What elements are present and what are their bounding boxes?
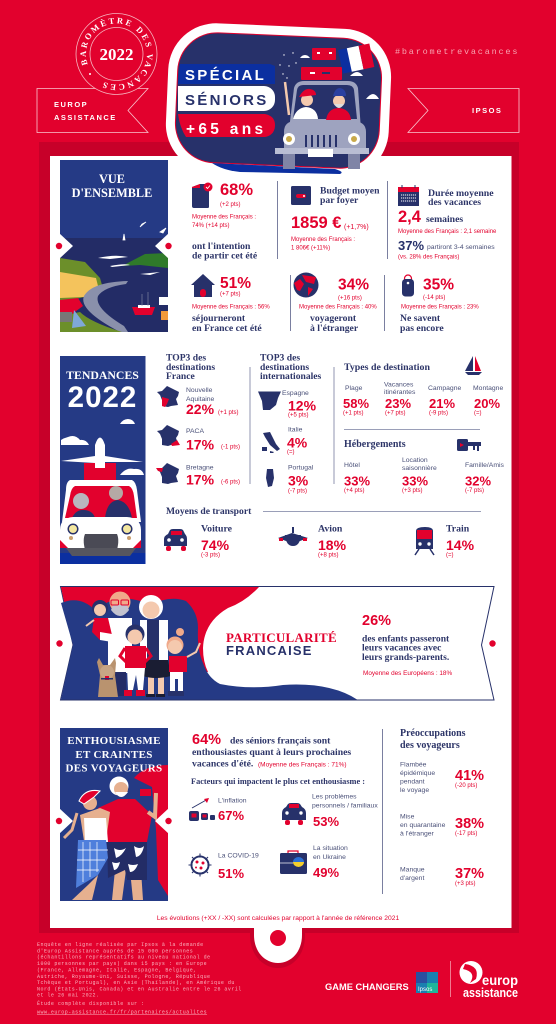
top3 destinations France: 17% [186, 436, 215, 452]
préoccupations des voyageurs: à l'étranger [400, 830, 435, 838]
préoccupations des voyageurs: d'argent [400, 875, 424, 882]
préoccupations des voyageurs: 41% [455, 768, 484, 784]
jeep [275, 81, 369, 169]
types de destination: Plage [345, 385, 363, 392]
types de destination: (=) [474, 410, 482, 416]
stat: intention de partir: 74% (+14 pts) [192, 223, 230, 229]
icon: virus [188, 854, 212, 876]
icon: luggage tag [402, 275, 414, 296]
stat: ne savent pas encore: pas encore [400, 323, 444, 334]
stat 26% [362, 613, 452, 677]
stat: voyageront à l'étranger: voyageront [310, 313, 357, 324]
stat: budget moyen: 1859 € [291, 214, 341, 232]
préoccupations des voyageurs: Mise [400, 814, 415, 820]
heading: VUE [99, 172, 125, 186]
icon: plane [278, 527, 308, 546]
icon: map France PACA [157, 425, 180, 446]
logo: Ipsos game changers [325, 972, 438, 993]
heading [72, 172, 152, 200]
moyens de transport: (=) [446, 552, 454, 558]
top3 destinations internationales: destinations [260, 362, 309, 373]
logo: Europ Assistance [460, 961, 518, 1000]
car with couple [60, 480, 146, 564]
logo: Ipsos game changers: Ipsos [418, 987, 432, 993]
icon: key [457, 439, 481, 451]
methodology note: Nord (États-Unis, Canada) et en Australie entre le 26 avril [37, 986, 242, 992]
dark red frame [39, 142, 519, 933]
dots [56, 818, 172, 824]
text: 64% enthousiastes: enthousiastes quant à leurs prochaines [192, 747, 351, 758]
types de destination: 20% [474, 396, 500, 411]
heading: TENDANCES [66, 368, 139, 382]
facteurs: Facteurs qui impactent le plus cet enthousiasme : [191, 777, 365, 786]
moyens de transport: Train [446, 524, 470, 534]
hébergements: (-7 pts) [465, 488, 484, 494]
types de destination: Vacances [384, 382, 414, 388]
préoccupations des voyageurs: des voyageurs [400, 740, 460, 751]
stat: intention de partir: 68% [220, 181, 253, 199]
stat: voyageront à l'étranger: (+16 pts) [338, 296, 362, 302]
methodology note: 1000 personnes par pays) dans 15 pays : en Europe [37, 961, 207, 967]
stamp: baromètre 2022: BAROMÈTRE DES VACANCES [80, 18, 153, 90]
dots [56, 243, 172, 249]
stat: séjourneront en France: séjourneront [192, 313, 246, 324]
types de destination: 23% [385, 396, 411, 411]
top3 destinations France [156, 352, 240, 488]
icon: car [282, 803, 306, 825]
stat: durée moyenne: 2,4 [398, 208, 422, 226]
types de destination: 21% [429, 396, 455, 411]
logo: Europ Assistance: europ [482, 973, 518, 988]
man [98, 776, 156, 900]
dog [97, 658, 118, 697]
methodology note: Enquête en ligne réalisée par Ipsos à la demande [37, 942, 204, 948]
icon: house [191, 274, 215, 297]
facteurs: L'inflation [218, 798, 247, 804]
types de destination: Campagne [428, 385, 461, 392]
heading: ENTHOUSIASME [67, 735, 161, 747]
grandfather [108, 592, 132, 696]
top3 destinations internationales: internationales [260, 371, 322, 382]
strip: séniors: SÉNIORS [185, 92, 269, 109]
stat: budget moyen: Moyenne des Français : [291, 237, 355, 243]
text: 64% enthousiastes: vacances d'été. [192, 758, 253, 770]
icon: briefcase Ukraine [280, 851, 307, 874]
girl [166, 628, 200, 696]
woman [64, 790, 110, 900]
top3 destinations internationales: TOP3 des [260, 352, 300, 364]
stat: voyageront à l'étranger: Moyenne des Français : 40% [299, 304, 377, 310]
text: 64% enthousiastes: des séniors français sont [230, 736, 331, 746]
stamp: baromètre 2022: 2022 [100, 45, 134, 64]
facteurs: personnels / familiaux [312, 802, 378, 810]
methodology note: www.europ-assistance.fr/fr/partenaires/actualites [37, 1010, 207, 1016]
top3 destinations France: Bretagne [186, 464, 214, 472]
top3 destinations France: (-1 pts) [221, 444, 240, 450]
types de destination: (+1 pts) [343, 410, 364, 416]
stat: intention de partir: de partir cet été [192, 250, 258, 262]
stat: voyageront à l'étranger: 34% [338, 276, 369, 294]
top3 destinations France: 22% [186, 401, 215, 417]
icon: wallet [291, 186, 311, 205]
icon: globe [294, 272, 318, 298]
top3 destinations internationales [258, 352, 322, 494]
red wave [61, 587, 259, 672]
hébergements: Famille/Amis [465, 462, 504, 469]
hébergements: saisonnière [402, 465, 437, 472]
methodology note: Étude complète disponible sur : [37, 1000, 145, 1007]
suitcases [301, 48, 342, 80]
stat 26%: leurs grands-parents. [362, 652, 449, 663]
icon: suitcase check [192, 182, 212, 208]
landscape illustration [60, 160, 168, 332]
stat: durée moyenne: Durée moyenne [428, 188, 494, 199]
facteurs: en Ukraine [313, 854, 346, 861]
préoccupations des voyageurs: en quarantaine [400, 822, 446, 829]
icon: map France Bretagne [156, 463, 179, 484]
hébergements: Location [402, 457, 428, 464]
travellers [285, 82, 351, 120]
heading: ET CRAINTES [75, 749, 153, 761]
clouds and stars [279, 52, 379, 99]
heading [66, 735, 162, 774]
types de destination: itinérantes [384, 389, 416, 396]
stat 26%: leurs vacances avec [362, 642, 442, 654]
hébergements: (+3 pts) [402, 488, 423, 494]
top3 destinations internationales: 12% [288, 398, 317, 414]
types de destination: Types de destination [344, 362, 430, 373]
hébergements: 33% [402, 474, 428, 488]
stat: intention de partir [192, 181, 258, 262]
top3 destinations France: (+1 pts) [218, 410, 239, 416]
hébergements: 33% [344, 474, 370, 488]
methodology note: (échantillons représentatifs au niveau national de [37, 954, 211, 960]
bottom tab with dot [254, 927, 302, 963]
hébergements: 32% [465, 474, 491, 488]
préoccupations des voyageurs: (-20 pts) [455, 783, 477, 789]
heading: PARTICULARITÉ [226, 630, 337, 645]
icon: sailboat [465, 356, 482, 375]
plane [61, 438, 143, 468]
seniors couple [64, 776, 156, 900]
panel: particularité française: FRANCAISE [226, 643, 313, 658]
ribbon: Ipsos [408, 88, 519, 132]
top3 destinations France: (-6 pts) [221, 480, 240, 486]
toddler [86, 600, 118, 642]
stat: budget moyen: (+1,7%) [344, 224, 369, 231]
dots [56, 640, 496, 647]
facteurs: Les problèmes [312, 794, 357, 800]
moyens de transport: 74% [201, 537, 230, 553]
icon: map France Nouvelle-Aquitaine [157, 386, 179, 407]
stat: intention de partir: (+2 pts) [220, 202, 241, 208]
stat: intention de partir: Moyenne des Français : [192, 214, 256, 220]
red curtain [134, 765, 168, 896]
icon: inflation [189, 798, 215, 821]
top3 destinations internationales: Italie [288, 426, 303, 434]
stat 26%: Moyenne des Européens : 18% [363, 670, 452, 677]
top3 destinations France: destinations [166, 362, 215, 373]
logo: Ipsos game changers: GAME CHANGERS [325, 982, 409, 992]
préoccupations des voyageurs: Préoccupations [400, 728, 466, 739]
stat: séjourneront en France [191, 274, 270, 334]
stat: intention de partir: ont l'intention [192, 241, 251, 252]
stat: durée moyenne: (vs. 28% des Français) [398, 254, 459, 260]
stat: durée moyenne: des vacances [428, 197, 481, 208]
stat 26%: 26% [362, 613, 391, 629]
facteurs: 67% [218, 808, 244, 823]
stat: budget moyen: par foyer [320, 195, 359, 206]
notches [59, 808, 169, 834]
strip: spécial: SPÉCIAL [185, 67, 266, 84]
white main panel [50, 156, 512, 928]
stat: ne savent pas encore: Ne savent [400, 313, 441, 324]
hébergements [344, 439, 504, 494]
facteurs: 53% [313, 814, 339, 829]
types de destination: (+7 pts) [385, 410, 406, 416]
top3 destinations internationales: Portugal [288, 464, 314, 472]
ribbon: Europ Assistance: EUROP [54, 100, 88, 109]
panel: vue d'ensemble [56, 160, 172, 332]
logo: Europ Assistance: assistance [463, 985, 518, 1000]
strip: +65 ans: +65 ans [186, 121, 266, 138]
icon: map Portugal [266, 469, 274, 487]
hashtag: #barometrevacances [395, 47, 519, 57]
top3 destinations France: Nouvelle [186, 387, 213, 394]
icon: train [415, 527, 434, 555]
top3 destinations France: 17% [186, 472, 215, 488]
moyens de transport: Voiture [201, 524, 233, 534]
types de destination: Montagne [473, 385, 503, 392]
notches [59, 233, 169, 259]
types de destination [343, 356, 503, 416]
stat: budget moyen: Budget moyen [320, 186, 380, 196]
stat: voyageront à l'étranger [294, 272, 377, 334]
hébergements: Hébergements [344, 439, 406, 450]
boy [120, 624, 151, 696]
text: 64% enthousiastes [192, 732, 351, 770]
préoccupations des voyageurs: Manque [400, 866, 425, 874]
icon: calendar [398, 185, 419, 206]
banner outline [60, 586, 494, 700]
family illustration [86, 592, 200, 697]
methodology note: Autriche, Royaume-Uni, Suisse, Pologne, République [37, 974, 211, 980]
strip: +65 ans [178, 114, 275, 138]
methodology note: et le 26 mai 2022. [37, 992, 99, 998]
stat: durée moyenne [398, 185, 497, 260]
panel: particularité française [56, 586, 496, 700]
hébergements: Hôtel [344, 462, 360, 469]
top3 destinations internationales: Espagne [282, 390, 309, 397]
préoccupations des voyageurs: (+3 pts) [455, 881, 476, 887]
facteurs: La situation [313, 845, 348, 852]
ribbon: Ipsos: IPSOS [472, 106, 502, 115]
moyens de transport: 14% [446, 537, 475, 553]
préoccupations des voyageurs: le voyage [400, 787, 429, 794]
moyens de transport: 18% [318, 537, 347, 553]
bottom tab shadow [250, 928, 305, 968]
facteurs: 49% [313, 865, 339, 880]
stat: budget moyen: 1 806€ (+11%) [291, 246, 330, 252]
ribbon: Europ Assistance [37, 88, 148, 132]
préoccupations des voyageurs: (-17 pts) [455, 831, 477, 837]
stat: budget moyen [291, 186, 380, 252]
icon: map Italy [262, 432, 280, 453]
ribbon: Europ Assistance: ASSISTANCE [54, 113, 117, 122]
header badge: spécial séniors [164, 21, 393, 180]
stat: durée moyenne: partiront 3-4 semaines [427, 244, 495, 251]
stat: voyageront à l'étranger: à l'étranger [310, 323, 359, 334]
moyens de transport: Moyens de transport [166, 506, 252, 517]
moyens de transport [164, 506, 475, 558]
icon: car [164, 529, 187, 551]
clouds [61, 419, 144, 475]
methodology note [37, 942, 242, 1016]
préoccupations des voyageurs: Flambée [400, 762, 427, 768]
stat: ne savent pas encore: 35% [423, 276, 454, 294]
stat: ne savent pas encore: (-14 pts) [423, 295, 445, 301]
facteurs: 51% [218, 866, 244, 881]
top3 destinations internationales: 4% [287, 434, 308, 450]
types de destination: 58% [343, 396, 369, 411]
facteurs [188, 777, 378, 881]
facteurs: La COVID-19 [218, 852, 259, 860]
hébergements: (+4 pts) [344, 488, 365, 494]
top3 destinations France: Aquitaine [186, 396, 215, 403]
methodology note: d'Europ Assistance auprès de 15 000 personnes [37, 948, 193, 954]
grandmother [139, 595, 171, 697]
préoccupations des voyageurs: épidémique [400, 770, 435, 777]
préoccupations des voyageurs [400, 728, 484, 887]
stat: séjourneront en France: 51% [220, 275, 251, 292]
methodology note: (France, Allemagne, Italie, Espagne, Belgique, [37, 968, 197, 974]
top3 destinations France: PACA [186, 428, 204, 435]
préoccupations des voyageurs: pendant [400, 778, 425, 786]
top3 destinations France: TOP3 des [166, 352, 206, 364]
stat: durée moyenne: 37% [398, 238, 424, 253]
blue wave [61, 599, 357, 700]
heading: DES VOYAGEURS [66, 762, 162, 774]
moyens de transport: Avion [318, 524, 343, 534]
text: 64% enthousiastes: (Moyenne des Français : 71%) [258, 762, 347, 768]
top3 destinations internationales: (=) [287, 450, 295, 456]
panel: tendances 2022 [60, 356, 146, 564]
stat: ne savent pas encore [400, 275, 479, 334]
stat: ne savent pas encore: Moyenne des Français : 23% [401, 304, 479, 310]
red suitcase [84, 463, 116, 481]
moyens de transport: (-3 pts) [201, 552, 220, 558]
stat: durée moyenne: semaines [426, 214, 463, 225]
stat: durée moyenne: Moyenne des Français : 2,1 semaine [398, 229, 497, 235]
flag [338, 43, 374, 74]
top3 destinations internationales: (+5 pts) [288, 412, 309, 418]
footnote: Les évolutions (+XX / -XX) sont calculées par rapport à l'année de référence 2021 [157, 915, 399, 922]
stat: séjourneront en France: Moyenne des Français : 56% [192, 304, 270, 310]
badge background [164, 21, 393, 180]
year: 2022 [68, 381, 137, 414]
préoccupations des voyageurs: 37% [455, 866, 484, 882]
top3 destinations internationales: 3% [288, 472, 309, 488]
panel: enthousiasme et craintes [56, 728, 172, 901]
heading: D'ENSEMBLE [72, 186, 152, 200]
stat 26%: des enfants passeront [362, 634, 450, 644]
top3 destinations internationales: (-7 pts) [288, 488, 307, 494]
methodology note: Tchèque et Portugal), en Asie (Thaïlande), en Amérique du [37, 980, 235, 986]
strip: séniors [178, 86, 275, 111]
types de destination: (-9 pts) [429, 410, 448, 416]
text: 64% enthousiastes: 64% [192, 732, 221, 748]
stat: séjourneront en France: en France cet été [192, 323, 262, 334]
icon: map Spain [258, 392, 281, 410]
préoccupations des voyageurs: 38% [455, 816, 484, 832]
top3 destinations France: France [166, 371, 196, 382]
stat: séjourneront en France: (+7 pts) [220, 292, 241, 298]
moyens de transport: (+8 pts) [318, 552, 339, 558]
